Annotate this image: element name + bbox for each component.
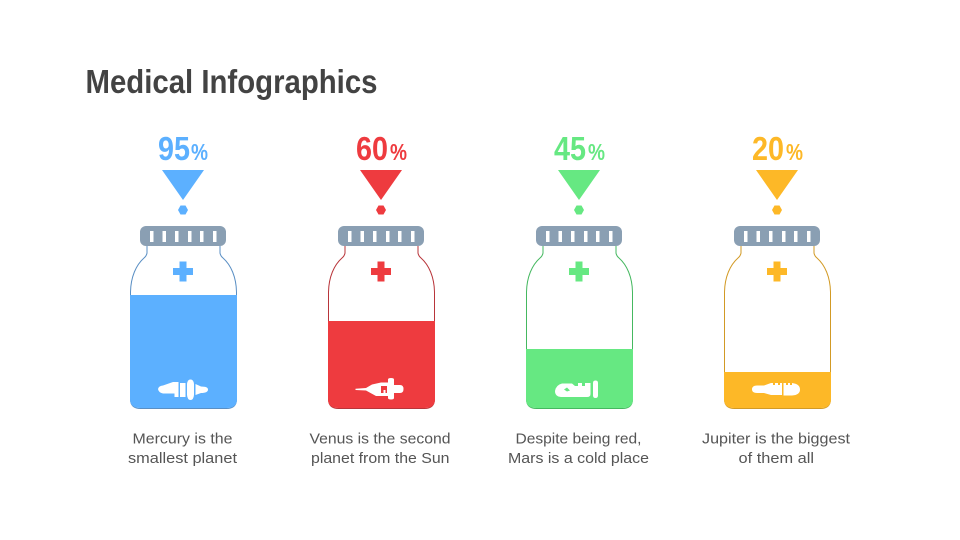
icon: pointer triangle and dot — [558, 170, 600, 214]
description: planet from the Sun — [311, 450, 450, 467]
bottle liquid — [526, 349, 633, 408]
percentage: 45%: 45 — [554, 130, 586, 167]
percentage: 20%: 20 — [752, 130, 784, 167]
bottle outline — [724, 246, 830, 408]
bottle cap — [536, 226, 622, 246]
panel: Jupiter 20% — [702, 130, 851, 467]
bottle — [724, 226, 831, 408]
bottle liquid — [130, 295, 237, 408]
description — [310, 430, 450, 467]
description: Mars is a cold place — [508, 450, 649, 467]
description — [128, 430, 238, 467]
bottle cap — [338, 226, 424, 246]
description: smallest planet — [128, 450, 238, 467]
description — [702, 430, 851, 467]
bottle liquid — [724, 372, 831, 408]
percentage: 20%: % — [786, 139, 803, 165]
bottle outline — [130, 246, 236, 408]
panel: Mars 45% — [508, 130, 649, 467]
bottle — [130, 226, 237, 408]
bottle outline — [328, 246, 434, 408]
percentage: 60%: % — [390, 139, 407, 165]
bottle — [328, 226, 435, 408]
description: Despite being red, — [516, 430, 642, 448]
bottle cap — [734, 226, 820, 246]
bottle — [526, 226, 633, 408]
description: Jupiter is the biggest — [702, 430, 851, 448]
panel: Venus 60% — [310, 130, 450, 467]
icon: pointer triangle and dot — [162, 170, 204, 214]
bottle outline — [526, 246, 632, 408]
panel: Mercury 95% — [128, 130, 238, 467]
description: of them all — [738, 450, 814, 467]
icon: pointer triangle and dot — [756, 170, 798, 214]
percentage: 45%: % — [588, 139, 605, 165]
icon: pointer triangle and dot — [360, 170, 402, 214]
icon: plus — [173, 262, 193, 282]
icon: plus — [767, 262, 787, 282]
description — [508, 430, 649, 467]
icon: vial — [555, 380, 598, 398]
percentage: 95%: 95 — [158, 130, 190, 167]
percentage: 95%: % — [191, 139, 208, 165]
icon: ampoule — [752, 383, 800, 396]
bottle cap — [140, 226, 226, 246]
title: Medical Infographics — [86, 63, 378, 100]
icon: dropper — [158, 380, 208, 400]
icon: plus — [569, 262, 589, 282]
percentage: 60%: 60 — [356, 130, 388, 167]
icon: syringe — [356, 378, 404, 400]
description: Venus is the second — [310, 430, 450, 448]
bottle liquid — [328, 321, 435, 408]
icon: plus — [371, 262, 391, 282]
description: Mercury is the — [132, 430, 232, 448]
